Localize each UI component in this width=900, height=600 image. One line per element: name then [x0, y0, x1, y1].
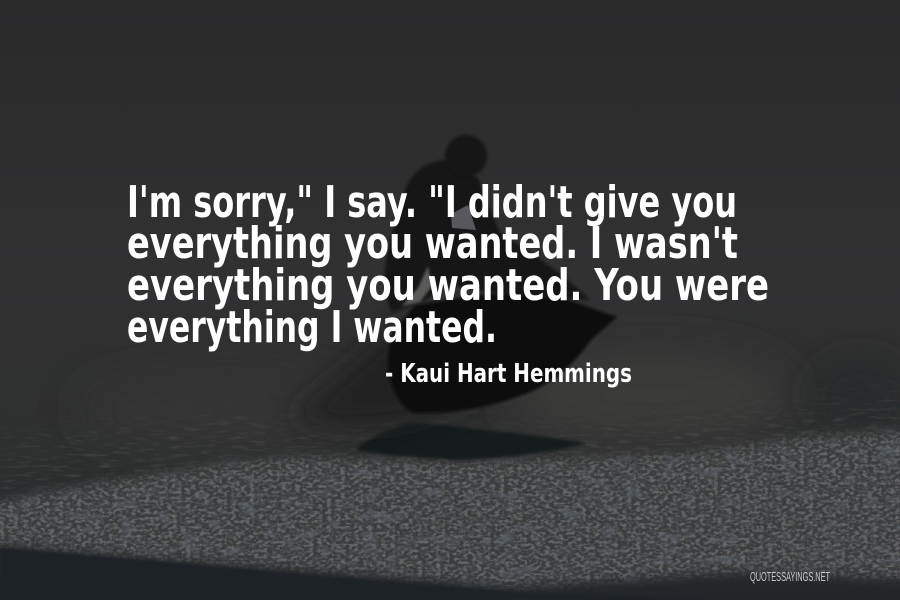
quote infographic	[0, 134, 900, 600]
background: dark water at the bottom-left	[0, 548, 700, 600]
rider body	[385, 160, 590, 312]
background: sea surface texture	[2, 400, 898, 490]
author attribution: - Kaui Hart Hemmings	[385, 359, 632, 389]
hull	[388, 290, 617, 413]
quote text	[127, 177, 769, 353]
watermark: QUOTESSAYINGS.NET	[750, 569, 830, 584]
photo: jet ski shadow on water	[356, 423, 585, 460]
background: foam wake	[0, 428, 900, 591]
quote line 4: everything I wanted.	[127, 302, 497, 353]
light patch on torso	[451, 205, 476, 230]
background: distant spray	[80, 350, 900, 446]
hull shadow	[287, 320, 480, 428]
photo: jet ski and rider	[287, 135, 617, 428]
rider head	[445, 135, 487, 177]
spray by the leg	[402, 266, 432, 306]
